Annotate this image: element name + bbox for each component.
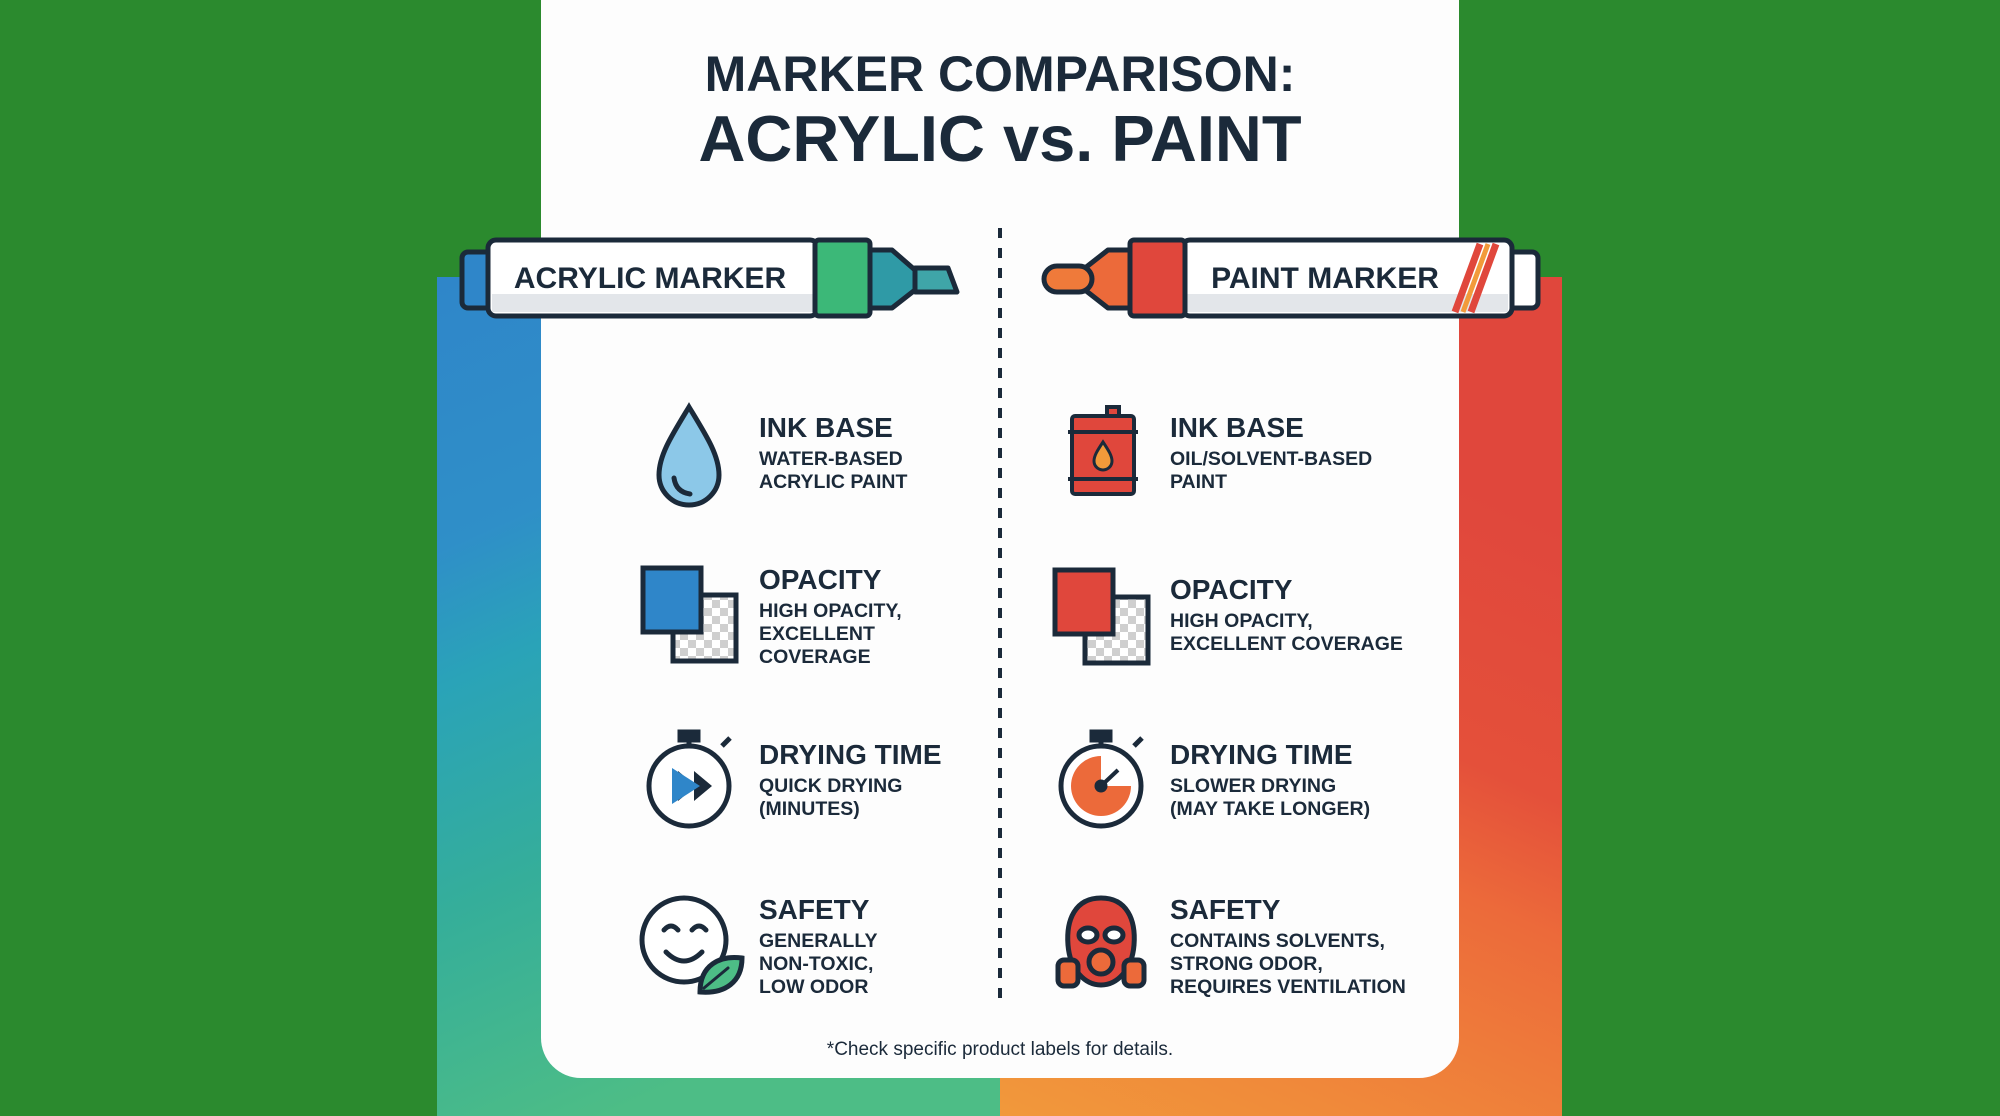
icon: stopwatch fast (649, 732, 730, 826)
text: paint opacity: EXCELLENT COVERAGE (1170, 633, 1403, 655)
text: paint opacity: OPACITY (1170, 574, 1293, 605)
divider dashed line (998, 228, 1002, 1002)
text: paint ink base: PAINT (1170, 471, 1227, 493)
text: acrylic drying time: (MINUTES) (759, 798, 860, 820)
title (698, 46, 1302, 175)
acrylic marker (462, 240, 957, 316)
title: MARKER COMPARISON: (705, 46, 1295, 102)
text: acrylic drying time (759, 739, 942, 820)
icon: smiley with leaf (642, 898, 742, 992)
text: paint opacity: HIGH OPACITY, (1170, 610, 1313, 632)
text: paint ink base: OIL/SOLVENT-BASED (1170, 448, 1372, 470)
text: acrylic opacity: COVERAGE (759, 646, 871, 668)
label: acrylic marker: ACRYLIC MARKER (514, 262, 786, 295)
icon: oil barrel (1068, 407, 1138, 494)
title: ACRYLIC vs. PAINT (698, 102, 1302, 175)
text: acrylic opacity: OPACITY (759, 564, 882, 595)
text: acrylic ink base: INK BASE (759, 412, 893, 443)
text: paint opacity (1170, 574, 1403, 655)
text: acrylic opacity: HIGH OPACITY, (759, 600, 902, 622)
text: paint safety (1170, 894, 1406, 998)
text: acrylic ink base (759, 412, 908, 493)
text: paint safety: SAFETY (1170, 894, 1281, 925)
text: acrylic ink base: WATER-BASED (759, 448, 903, 470)
text: acrylic opacity: EXCELLENT (759, 623, 875, 645)
text: paint ink base: INK BASE (1170, 412, 1304, 443)
text: paint drying time: (MAY TAKE LONGER) (1170, 798, 1370, 820)
text: paint safety: REQUIRES VENTILATION (1170, 976, 1406, 998)
label: paint marker: PAINT MARKER (1211, 262, 1439, 295)
text: paint drying time (1170, 739, 1370, 820)
text: paint safety: STRONG ODOR, (1170, 953, 1323, 975)
text: paint ink base (1170, 412, 1372, 493)
paint marker (1044, 240, 1538, 316)
icon: acrylic opacity (643, 568, 736, 661)
text: acrylic safety (759, 894, 877, 998)
text: acrylic drying time: DRYING TIME (759, 739, 942, 770)
text: acrylic safety: NON-TOXIC, (759, 953, 873, 975)
icon: paint opacity (1055, 570, 1148, 663)
text: acrylic safety: LOW ODOR (759, 976, 868, 998)
icon: stopwatch slow (1061, 732, 1142, 826)
text: paint drying time: SLOWER DRYING (1170, 775, 1336, 797)
text: acrylic safety: SAFETY (759, 894, 870, 925)
text: paint drying time: DRYING TIME (1170, 739, 1353, 770)
text: acrylic opacity (759, 564, 902, 668)
text: acrylic drying time: QUICK DRYING (759, 775, 902, 797)
text: acrylic ink base: ACRYLIC PAINT (759, 471, 908, 493)
text: acrylic safety: GENERALLY (759, 930, 877, 952)
text: paint safety: CONTAINS SOLVENTS, (1170, 930, 1385, 952)
icon: gas mask (1058, 898, 1144, 986)
footnote: *Check specific product labels for details. (827, 1039, 1173, 1060)
icon: water drop (659, 407, 719, 505)
panel: card (541, 0, 1459, 1078)
